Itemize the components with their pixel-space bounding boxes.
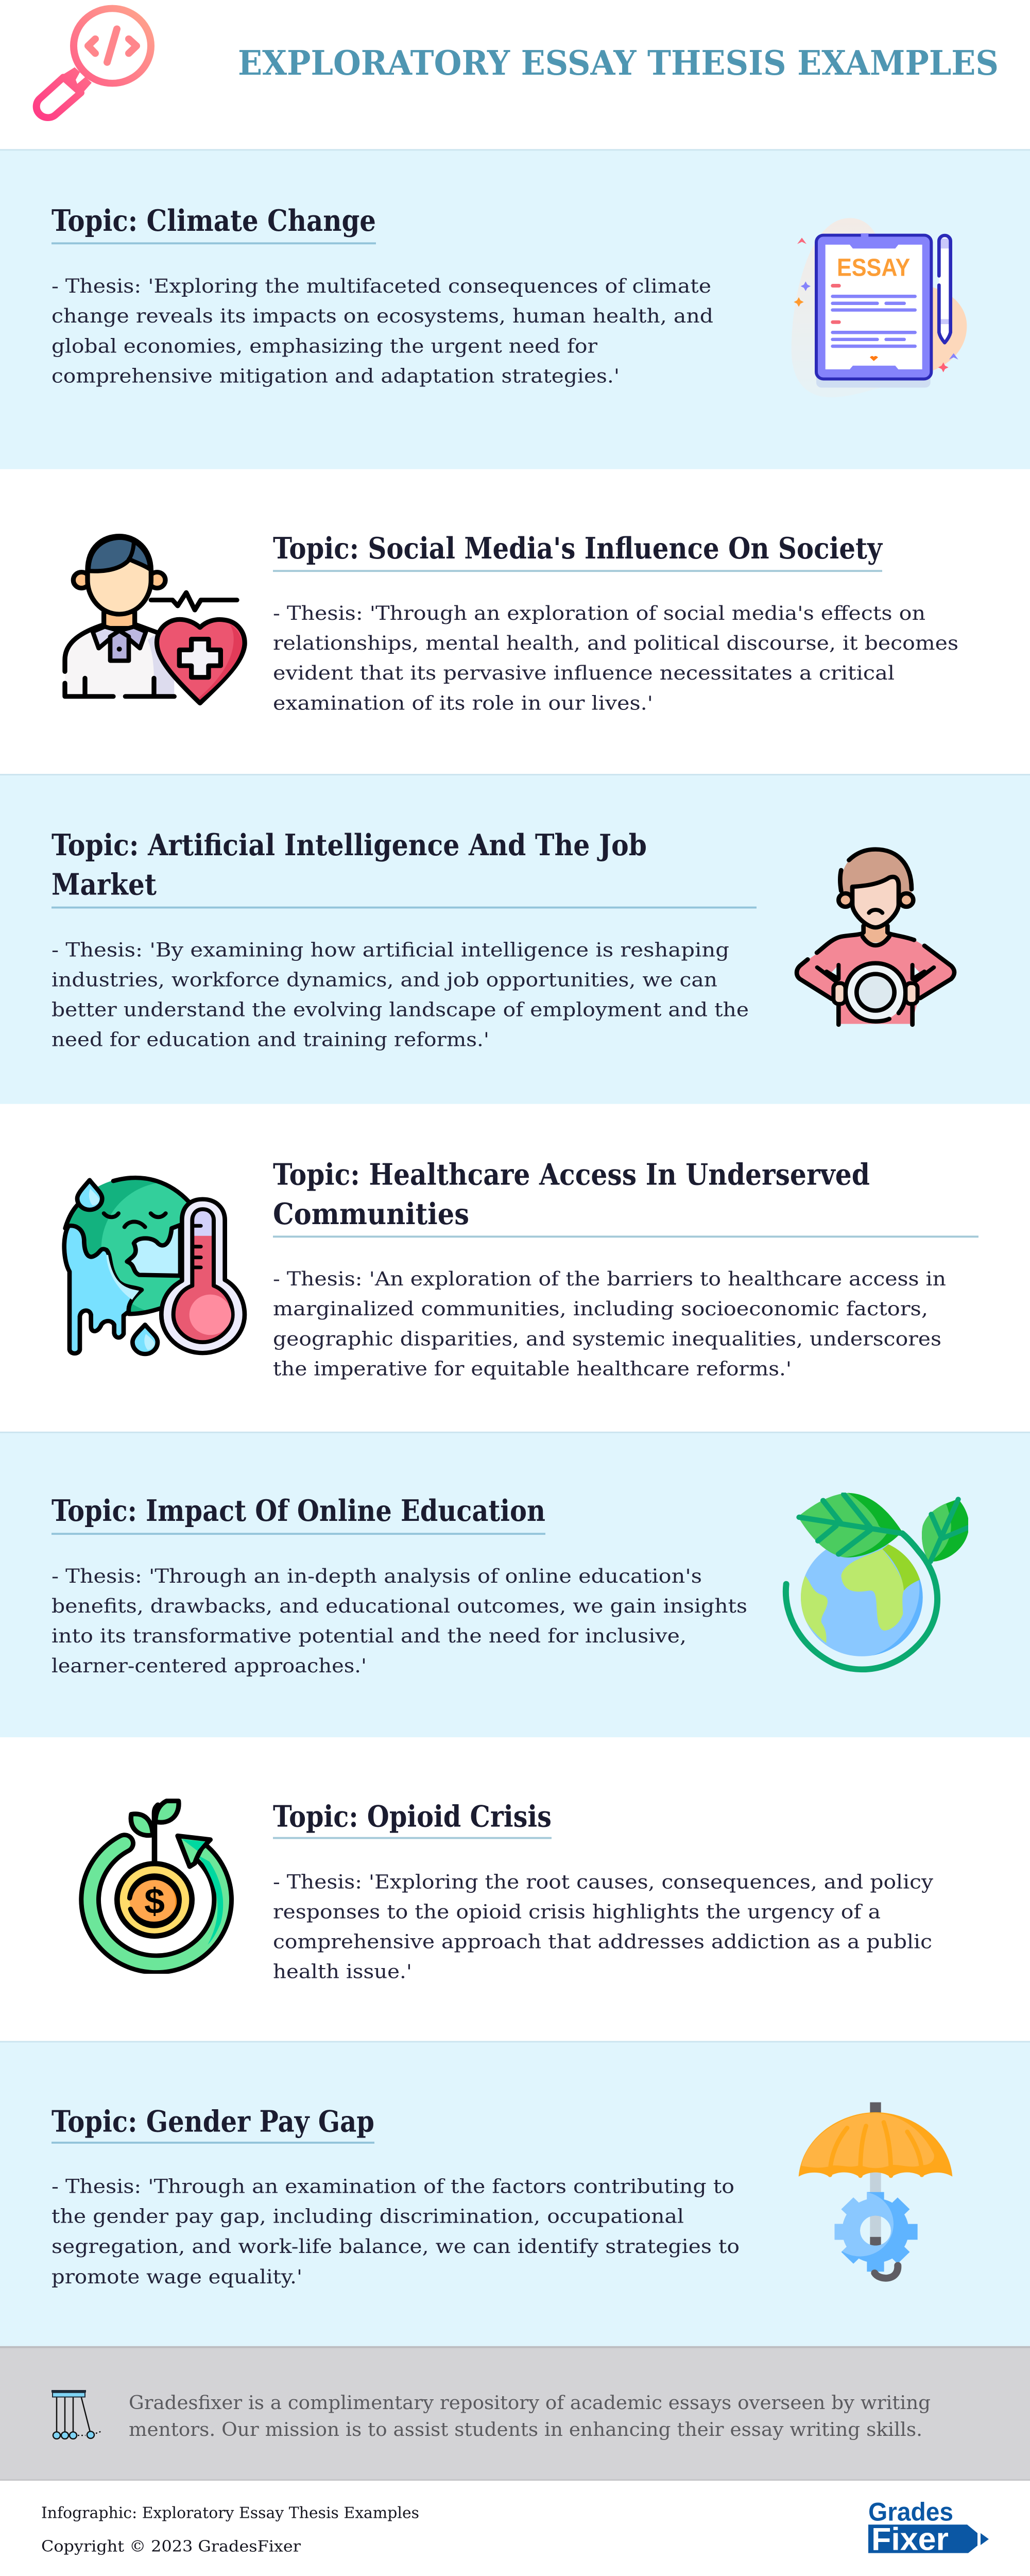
icon: newton's cradle xyxy=(52,2390,102,2439)
footer xyxy=(0,2481,1030,2576)
text: healthcare thesis: geographic disparities, and systemic inequalities, underscores xyxy=(273,1328,941,1350)
icon: essay tablet and pen xyxy=(792,218,967,397)
icon: umbrella with gear xyxy=(799,2103,952,2278)
panel: gender pay gap xyxy=(0,2041,1030,2347)
heading: healthcare xyxy=(273,1157,978,1238)
footer credits: Copyright © 2023 GradesFixer xyxy=(41,2538,301,2555)
text: climate change thesis: comprehensive mitigation and adaptation strategies.' xyxy=(52,365,620,387)
icon: man with heart and pulse xyxy=(65,536,245,703)
logo: GradesFixer: Fixer xyxy=(871,2522,949,2557)
text: gender pay gap thesis: - Thesis: 'Through an examination of the factors contributing to xyxy=(52,2175,734,2198)
text: opioid crisis thesis xyxy=(273,1871,933,1983)
text: healthcare thesis xyxy=(273,1268,946,1380)
text: healthcare thesis: the imperative for equitable healthcare reforms.' xyxy=(273,1358,792,1380)
panel: climate change xyxy=(0,149,1030,469)
text: about gradesfixer xyxy=(129,2391,931,2441)
icon: globe with leaves xyxy=(786,1493,969,1669)
text: opioid crisis thesis: health issue.' xyxy=(273,1960,412,1983)
panel: artificial intelligence xyxy=(0,774,1030,1104)
text: opioid crisis thesis: - Thesis: 'Exploring the root causes, consequences, and policy xyxy=(273,1871,933,1893)
text: artificial intelligence thesis: industries, workforce dynamics, and job opportunities, we can xyxy=(52,969,717,991)
text: climate change thesis: global economies, emphasizing the urgent need for xyxy=(52,335,598,358)
text: social media thesis: examination of its role in our lives.' xyxy=(273,692,653,715)
text: gender pay gap thesis: segregation, and work-life balance, we can identify strategies to xyxy=(52,2235,740,2258)
icon: coin with plant and circular arrow: $ xyxy=(144,1881,165,1921)
heading: healthcare: Communities xyxy=(273,1196,469,1231)
heading: artificial intelligence: Topic: Artificial Intelligence And The Job xyxy=(52,827,647,862)
text: artificial intelligence thesis xyxy=(52,939,749,1051)
icon: magnifying glass with code symbol xyxy=(37,8,151,117)
text: opioid crisis thesis: comprehensive approach that addresses addiction as a public xyxy=(273,1930,932,1953)
panel: opioid crisis xyxy=(79,1799,933,1978)
icon: melting earth with thermometer xyxy=(63,1178,245,1354)
text: about gradesfixer: Gradesfixer is a complimentary repository of academic essays overseen by writing xyxy=(129,2391,931,2414)
text: artificial intelligence thesis: better understand the evolving landscape of employment and the xyxy=(52,998,749,1021)
header xyxy=(0,0,1030,149)
footer credits xyxy=(41,2504,419,2555)
text: gender pay gap thesis xyxy=(52,2175,740,2289)
panel: online education xyxy=(0,1432,1030,1737)
text: climate change thesis: change reveals its impacts on ecosystems, human health, and xyxy=(52,305,713,328)
text: gender pay gap thesis: promote wage equality.' xyxy=(52,2265,302,2289)
panel: social media xyxy=(0,469,1030,774)
heading: gender pay gap: Topic: Gender Pay Gap xyxy=(52,2104,374,2139)
text: about gradesfixer: mentors. Our mission is to assist students in enhancing their essay writing skills. xyxy=(129,2418,922,2441)
text: online education thesis: learner-centered approaches.' xyxy=(52,1655,367,1677)
logo: GradesFixer xyxy=(868,2497,989,2557)
panel: healthcare xyxy=(62,1162,978,1380)
panel: about gradesfixer xyxy=(0,2346,1030,2481)
text: healthcare thesis: marginalized communities, including socioeconomic factors, xyxy=(273,1298,928,1320)
text: opioid crisis thesis: responses to the opioid crisis highlights the urgency of a xyxy=(273,1901,881,1923)
heading: healthcare: Topic: Healthcare Access In Underserved xyxy=(273,1157,870,1192)
logo: GradesFixer: Grades xyxy=(868,2497,953,2526)
text: social media thesis: evident that its pervasive influence necessitates a critical xyxy=(273,662,895,685)
icon: essay tablet and pen: ESSAY xyxy=(837,253,910,281)
heading: artificial intelligence xyxy=(52,827,757,908)
heading: climate change: Topic: Climate Change xyxy=(52,203,376,238)
text: artificial intelligence thesis: need for education and training reforms.' xyxy=(52,1028,489,1051)
footer credits: Infographic: Exploratory Essay Thesis Examples xyxy=(41,2504,419,2522)
text: online education thesis: into its transformative potential and the need for inclusive, xyxy=(52,1625,686,1648)
heading: artificial intelligence: Market xyxy=(52,867,157,902)
text: online education thesis xyxy=(52,1565,747,1677)
heading: opioid crisis: Topic: Opioid Crisis xyxy=(273,1799,552,1834)
text: climate change thesis xyxy=(52,275,713,387)
text: social media thesis xyxy=(273,602,958,715)
text: online education thesis: benefits, drawbacks, and educational outcomes, we gain insights xyxy=(52,1595,747,1618)
text: gender pay gap thesis: the gender pay gap, including discrimination, occupational xyxy=(52,2205,684,2228)
heading: online education: Topic: Impact Of Online Education xyxy=(52,1493,545,1528)
text: online education thesis: - Thesis: 'Through an in-depth analysis of online education's xyxy=(52,1565,702,1588)
text: social media thesis: relationships, mental health, and political discourse, it becomes xyxy=(273,632,958,655)
heading: social media: Topic: Social Media's Influence On Society xyxy=(273,531,883,566)
text: social media thesis: - Thesis: 'Through an exploration of social media's effects on xyxy=(273,602,925,625)
icon: man holding empty plate xyxy=(797,850,954,1025)
text: artificial intelligence thesis: - Thesis: 'By examining how artificial intelligence is reshaping xyxy=(52,939,729,961)
text: climate change thesis: - Thesis: 'Exploring the multifaceted consequences of climate xyxy=(52,275,711,298)
text: healthcare thesis: - Thesis: 'An exploration of the barriers to healthcare access in xyxy=(273,1268,946,1291)
icon: coin with plant and circular arrow xyxy=(90,1801,223,1964)
